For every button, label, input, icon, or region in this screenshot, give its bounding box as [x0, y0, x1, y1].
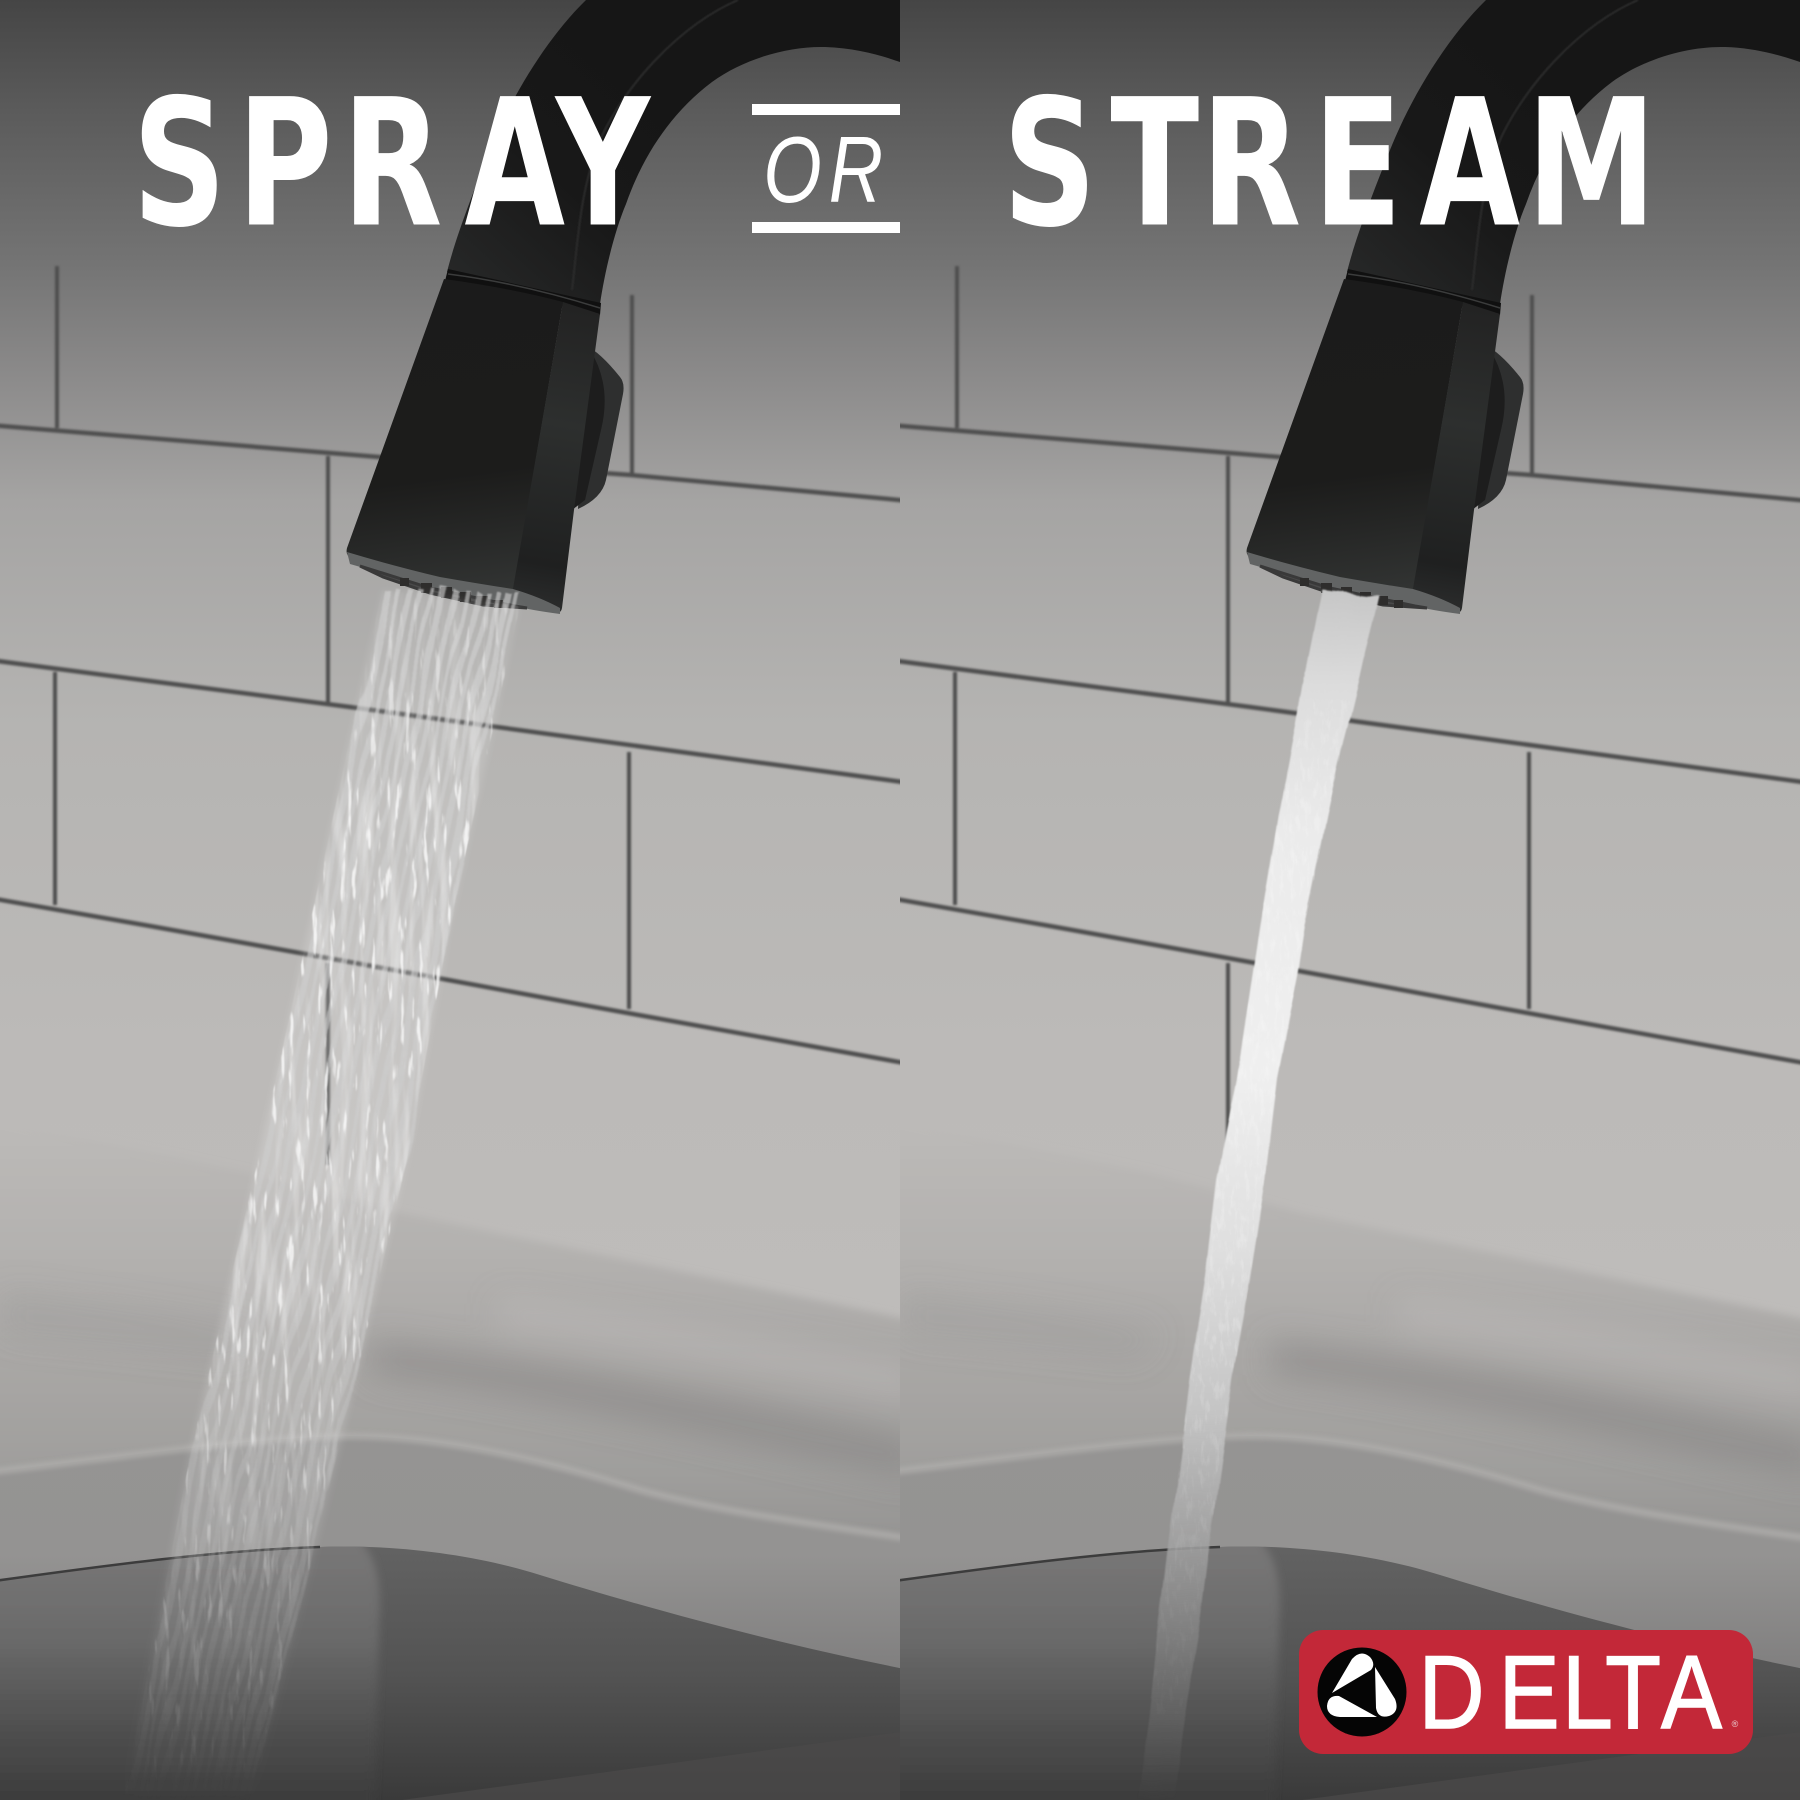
- OR top bar: [752, 104, 900, 115]
- collar highlight: [448, 274, 600, 308]
- faucet: [347, 0, 900, 614]
- collar: [445, 269, 601, 315]
- heading: STREAM: STREAM: [1003, 61, 1656, 267]
- spray haze: [123, 590, 520, 1800]
- spray glints: [123, 590, 520, 1800]
- nozzle outlets: [400, 578, 503, 608]
- button inner shade: [572, 350, 605, 510]
- divider: OR with bars: [752, 104, 900, 233]
- sink lip: [0, 1436, 920, 1720]
- kitchen scene with faucet: [0, 0, 930, 1800]
- sink edge line: [0, 1547, 320, 1583]
- spray head side: [511, 302, 600, 613]
- logo badge: [1299, 1630, 1753, 1754]
- spray jets: [130, 590, 517, 1800]
- stream body: [1138, 590, 1379, 1800]
- spray button: [578, 345, 624, 509]
- panel: stream photo: [870, 0, 1800, 1800]
- sink basin: [0, 1547, 920, 1800]
- kitchen scene copy: [870, 0, 1800, 1800]
- registered mark: ®: [1732, 1719, 1739, 1729]
- sink inner wall: [0, 1530, 380, 1800]
- logo: Delta: [1299, 1630, 1753, 1754]
- panel: spray photo: [0, 0, 930, 1800]
- nozzle teeth: [360, 566, 527, 608]
- OR bottom bar: [752, 222, 900, 233]
- water stream: [1138, 590, 1379, 1800]
- tile wall: [0, 0, 900, 1800]
- OR label: OR: [763, 118, 883, 223]
- logo wordmark: DELTA: [1419, 1634, 1723, 1750]
- countertop soft shadows: [0, 1290, 920, 1480]
- logo emblem: [1318, 1648, 1406, 1736]
- spray wisps: [123, 590, 520, 1800]
- nozzle rim: [347, 552, 560, 614]
- spray head front: [347, 279, 563, 604]
- tile grout lines: [0, 266, 910, 1165]
- countertop: [0, 1113, 930, 1580]
- faucet neck: [447, 0, 900, 304]
- sink front edge: [402, 1732, 900, 1800]
- stream grain: [1150, 700, 1352, 1714]
- neck highlight: [572, 0, 738, 290]
- sink rim highlight: [0, 1436, 920, 1540]
- water spray: [123, 590, 520, 1800]
- heading: SPRAY: SPRAY: [132, 61, 652, 267]
